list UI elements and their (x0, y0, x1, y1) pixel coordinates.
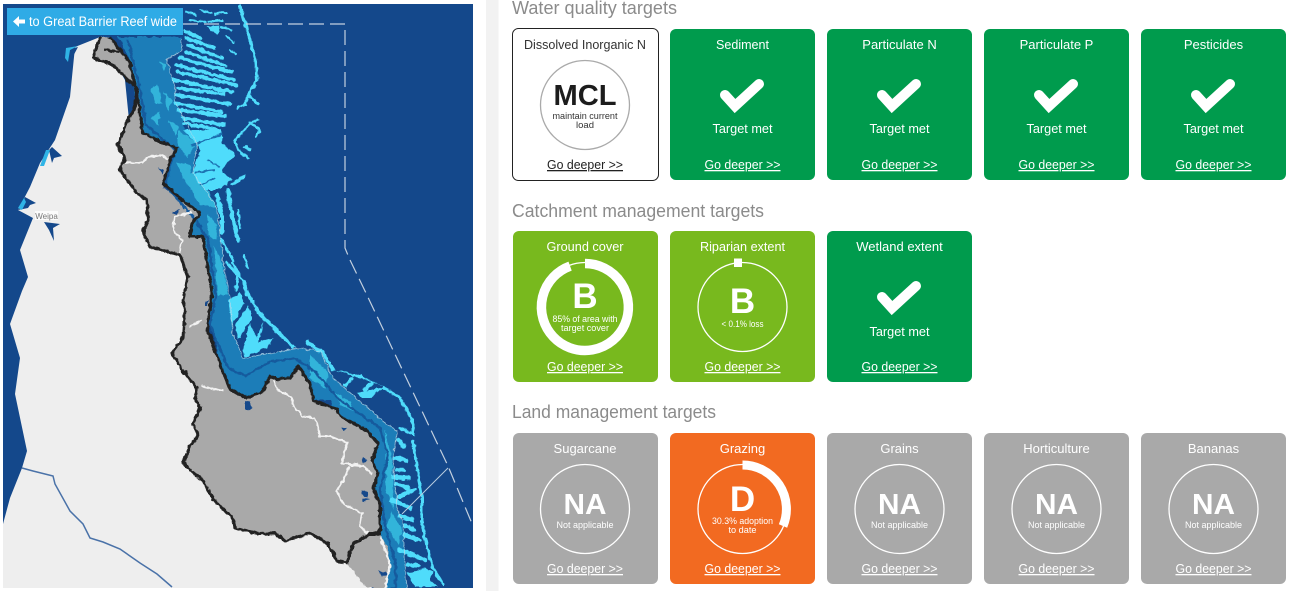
card: bananas: Not applicable (1185, 520, 1242, 531)
offshore boundary, dashed (183, 24, 473, 526)
card: sugarcane: Go deeper >> (547, 561, 623, 576)
card: sugarcane: Sugarcane (554, 441, 616, 456)
card: grains: Go deeper >> (862, 561, 938, 576)
icon: left arrow (13, 16, 25, 27)
card: horticulture: Go deeper >> (1018, 561, 1094, 576)
card: pesticides: Pesticides (1184, 37, 1244, 52)
card: pesticides: Target met (1184, 121, 1244, 136)
lighter mid-shelf patches (150, 62, 402, 545)
card: particulate P: Go deeper >> (1018, 157, 1094, 172)
card: grazing: to date (728, 525, 756, 536)
dark channel line (128, 40, 396, 588)
southern reefs (392, 440, 443, 587)
card: dissolved inorganic N: maintain current (552, 111, 618, 122)
reef, marine zones and catchment (93, 6, 443, 588)
small western reef marks (18, 46, 78, 210)
thin white zone lines (167, 38, 407, 588)
card: sediment: Sediment (716, 37, 769, 52)
card: particulate N: Particulate N (862, 37, 937, 52)
card: particulate N: Go deeper >> (862, 157, 938, 172)
card: particulate P: Target met (1026, 121, 1087, 136)
central bright reef patch (183, 130, 235, 190)
card: particulate P (984, 29, 1129, 180)
card: grazing: 30.3% adoption (712, 516, 773, 527)
card: horticulture: Horticulture (1023, 441, 1090, 456)
card: riparian extent: B (730, 282, 755, 321)
marine water quality zones (118, 37, 407, 588)
card: bananas: NA (1192, 489, 1235, 521)
card: ground cover: Go deeper >> (547, 359, 623, 374)
card: dissolved inorganic N: MCL (554, 80, 616, 112)
card: ground cover (513, 231, 658, 382)
card: grains (827, 433, 972, 584)
land mass (3, 37, 372, 588)
card: sugarcane (513, 433, 658, 584)
card: grazing: Grazing (720, 441, 765, 456)
lakes and dams (158, 168, 388, 576)
heading: land management: Land management targets (512, 402, 716, 422)
card: particulate N: Target met (870, 121, 930, 136)
card: particulate P: Particulate P (1020, 37, 1093, 52)
card: grains: NA (878, 489, 921, 521)
card: ground cover: Ground cover (546, 239, 624, 254)
card: dissolved inorganic N (512, 28, 658, 180)
card: riparian extent: Riparian extent (700, 239, 785, 254)
card: dissolved inorganic N: Go deeper >> (547, 157, 623, 172)
mid reefs (217, 176, 413, 434)
card: horticulture (984, 433, 1129, 584)
card: sugarcane: NA (564, 489, 607, 521)
card: wetland extent: Target met (870, 324, 930, 339)
catchment outline (93, 37, 380, 563)
card: grazing: Go deeper >> (704, 561, 780, 576)
western inlets (18, 47, 78, 241)
card: horticulture: NA (1035, 489, 1078, 521)
card: wetland extent (827, 231, 972, 382)
back button (7, 8, 183, 35)
card: sediment: Go deeper >> (704, 157, 780, 172)
card: ground cover: B (572, 277, 598, 316)
card: sugarcane: Not applicable (556, 520, 614, 531)
reef channels (190, 134, 222, 185)
town label: Weipa: Weipa (35, 212, 58, 221)
card: particulate N (827, 29, 972, 180)
card: bananas (1141, 433, 1286, 584)
card: pesticides (1141, 29, 1286, 180)
northern reefs (174, 6, 260, 158)
card: riparian extent: Go deeper >> (704, 359, 780, 374)
side strip (486, 0, 498, 591)
card: grazing (670, 433, 815, 584)
card: dissolved inorganic N: Dissolved Inorganic N (524, 37, 646, 52)
card: horticulture: Not applicable (1028, 520, 1085, 531)
card: ground cover: 85% of area with (552, 314, 618, 325)
heading: catchment management: Catchment management targets (512, 201, 764, 221)
card: ground cover: target cover (561, 323, 609, 334)
card: sediment: Target met (712, 121, 773, 136)
card: bananas: Go deeper >> (1176, 561, 1252, 576)
catchment area (93, 37, 390, 588)
internal catchment boundaries (125, 155, 390, 588)
river (22, 468, 172, 587)
card: riparian extent (670, 231, 815, 382)
card: grains: Not applicable (871, 520, 928, 531)
back button: to Great Barrier Reef wide (29, 14, 177, 29)
card: grains: Grains (880, 441, 919, 456)
card: grazing: D (730, 480, 755, 519)
card: riparian extent: < 0.1% loss (722, 319, 764, 330)
map: Cape York catchments and reef (3, 4, 473, 588)
card: sediment (670, 29, 815, 180)
card: wetland extent: Go deeper >> (862, 359, 938, 374)
card: pesticides: Go deeper >> (1176, 157, 1252, 172)
card: dissolved inorganic N: load (576, 120, 594, 131)
zone divider line (402, 468, 448, 514)
card: bananas: Bananas (1188, 441, 1240, 456)
card: wetland extent: Wetland extent (856, 239, 943, 254)
